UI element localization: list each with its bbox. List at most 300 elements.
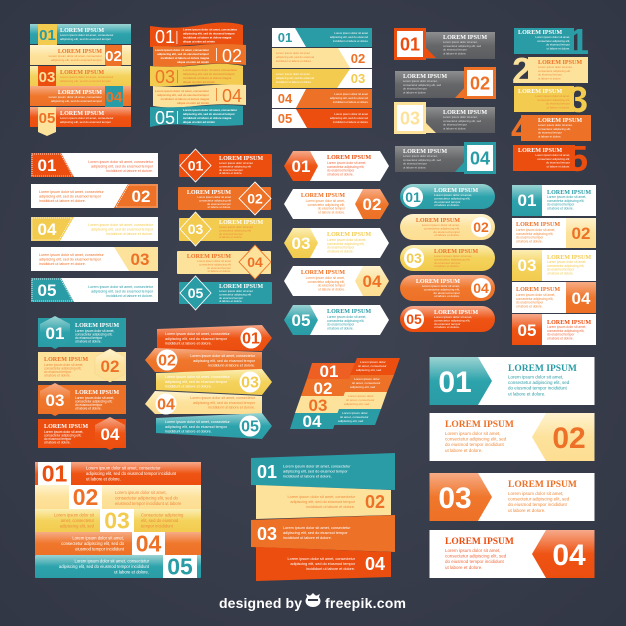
card 02: LOREM IPSUM bbox=[516, 222, 560, 228]
hex arrow 01: 01 bbox=[292, 157, 310, 176]
stair row 05: 05 bbox=[167, 554, 193, 580]
pill 05 bbox=[400, 306, 495, 332]
panel: dashed number tags bbox=[272, 28, 372, 128]
slant bar 05 bbox=[31, 278, 158, 302]
digit bar 4 bbox=[511, 108, 591, 149]
tag 01: 01 bbox=[278, 30, 292, 45]
badge row 04: Lorem ipsum dolor sit amet, bbox=[44, 430, 83, 434]
arrow banner 03 bbox=[156, 369, 272, 395]
pill 03: consectetur adipiscing elit, bbox=[434, 257, 470, 261]
grey bar 02: ut labore et dolore. bbox=[403, 90, 427, 94]
stair row 01 bbox=[35, 460, 201, 486]
hex arrow 04: consectetur adipiscing elit, bbox=[308, 280, 345, 284]
diamond bar 05: Lorem ipsum dolor sit amet bbox=[219, 289, 253, 293]
pill 01: ut labore et dolore. bbox=[434, 203, 460, 207]
large card 04: Lorem ipsum dolor sit amet, bbox=[445, 548, 501, 553]
tag 02: Lorem ipsum dolor sit amet bbox=[276, 51, 310, 55]
diamond bar 02: ut labore et dolore. bbox=[208, 205, 231, 209]
grey bar 04 bbox=[395, 144, 494, 172]
badge row 04 bbox=[38, 417, 126, 450]
tag 03: 03 bbox=[351, 71, 365, 86]
grey bar 01: Lorem ipsum dolor sit amet, bbox=[443, 40, 478, 44]
pill 02: Lorem ipsum dolor sit amet, bbox=[422, 223, 460, 227]
arrow banner 04 bbox=[145, 391, 262, 414]
arrow banner 03: adipiscing elit, sed do eiusmod tempor bbox=[165, 380, 228, 384]
hex arrow 02: consectetur adipiscing elit, bbox=[308, 203, 345, 207]
slant bar 01: Lorem ipsum dolor sit amet, consectetur bbox=[88, 160, 154, 164]
slant bar 04: 04 bbox=[38, 220, 57, 239]
skew bar 02 bbox=[256, 485, 391, 519]
stair row 02: eiusmod tempor incididunt ut labore bbox=[115, 501, 182, 506]
banner 02: Lorem ipsum dolor sit amet, consectetur bbox=[155, 48, 210, 52]
badge row 01: LOREM IPSUM bbox=[75, 323, 119, 329]
arrow banner 02: adipiscing elit, sed do eiusmod tempor bbox=[193, 359, 256, 363]
stair row 04: eiusmod tempor incididunt bbox=[75, 547, 125, 552]
slant bar 03 bbox=[31, 247, 158, 271]
arrow banner 02: Lorem ipsum dolor sit amet, consectetur bbox=[190, 354, 256, 358]
diamond bar 04: do eiusmod tempor bbox=[207, 266, 231, 270]
skew bar 03: 03 bbox=[257, 524, 277, 544]
stair row 02: consectetur adipiscing elit, sed do bbox=[115, 496, 179, 501]
fold row 01: Lorem ipsum dolor bbox=[360, 360, 386, 364]
arrow banner 05: incididunt ut labore et dolore. bbox=[165, 430, 212, 434]
card 05: do eiusmod tempor bbox=[547, 333, 575, 337]
grey bar 01: consectetur adipiscing elit, sed bbox=[443, 44, 482, 48]
tag 02 bbox=[272, 48, 372, 68]
skew bar 02: Lorem ipsum dolor sit amet, consectetur bbox=[287, 495, 356, 499]
tag 01 bbox=[272, 28, 372, 47]
card 03: Lorem ipsum dolor sit amet, bbox=[547, 260, 586, 264]
slant bar 05: 05 bbox=[38, 281, 56, 300]
slant bar 02: adipiscing elit, sed do eiusmod tempor bbox=[39, 194, 102, 198]
digit bar 1: do eiusmod tempor bbox=[546, 43, 570, 47]
diamond bar 02: Lorem ipsum dolor sit amet bbox=[197, 195, 231, 199]
row 01 teal: adipiscing elit, sed do eiusmod tempor bbox=[60, 37, 111, 41]
skew bar 04: incididunt ut labore et dolore. bbox=[306, 567, 355, 571]
diamond bar 01 bbox=[179, 149, 272, 182]
large card 02: Lorem ipsum dolor sit amet, bbox=[445, 431, 501, 436]
grey bar 03 bbox=[396, 104, 495, 133]
large card 02: ut labore et dolore. bbox=[445, 448, 483, 453]
digit bar 5: consectetur adipiscing elit, bbox=[537, 157, 570, 161]
badge row 01: do eiusmod tempor bbox=[75, 336, 103, 340]
banner 04 bbox=[153, 85, 246, 108]
card 03 bbox=[512, 250, 596, 281]
hex arrow 05: consectetur adipiscing elit, bbox=[327, 319, 364, 323]
card 01: ut labore et dolore. bbox=[547, 206, 574, 210]
arrow banner 04: adipiscing elit, sed do eiusmod tempor bbox=[193, 401, 256, 405]
tag 01: Lorem ipsum dolor sit amet bbox=[334, 31, 368, 35]
digit bar 1: consectetur adipiscing elit, bbox=[537, 39, 570, 43]
icon: freepik mascot bbox=[306, 593, 320, 607]
banner 01 bbox=[150, 22, 243, 47]
pill 02: do eiusmod tempor bbox=[434, 230, 460, 234]
diamond bar 02: LOREM IPSUM bbox=[187, 190, 231, 196]
stair row 05 bbox=[35, 554, 201, 580]
tag 05: incididunt ut labore et dolore bbox=[333, 120, 368, 124]
stair row 04 bbox=[35, 530, 201, 556]
fold row 03: Lorem ipsum dolor bbox=[348, 394, 374, 398]
fold row 04: Lorem ipsum dolor bbox=[342, 411, 368, 415]
digit bar 5: 5 bbox=[568, 138, 588, 179]
arrow banner 04: incididunt ut labore et dolore. bbox=[208, 406, 255, 410]
large card 04: 04 bbox=[552, 539, 586, 572]
badge row 01 bbox=[38, 316, 126, 349]
diamond bar 03: LOREM IPSUM bbox=[219, 220, 263, 226]
tag 04: incididunt ut labore et dolore bbox=[333, 100, 368, 104]
badge row 02: LOREM IPSUM bbox=[44, 357, 88, 363]
row 02 pale: Lorem ipsum dolor sit amet, consectetur bbox=[49, 54, 102, 58]
fold row 03: sit amet, consectetur bbox=[346, 398, 375, 402]
arrow banner 05: 05 bbox=[241, 418, 259, 436]
digit bar 1: LOREM IPSUM bbox=[518, 30, 562, 36]
row 05 red bbox=[30, 107, 131, 136]
pill 01: consectetur adipiscing elit, bbox=[434, 196, 470, 200]
row 01 teal: LOREM IPSUM bbox=[60, 28, 104, 34]
hex arrow 05: LOREM IPSUM bbox=[327, 309, 371, 315]
slant bar 03: adipiscing elit, sed do eiusmod tempor bbox=[39, 258, 102, 262]
diamond bar 04: LOREM IPSUM bbox=[187, 254, 231, 260]
digit bar 5 bbox=[513, 138, 588, 179]
pill 01: 01 bbox=[405, 189, 421, 205]
grey bar 04: LOREM IPSUM bbox=[403, 149, 447, 155]
digit bar 4: Lorem ipsum dolor sit amet, bbox=[538, 123, 573, 127]
diamond bar 01: 01 bbox=[188, 158, 203, 174]
grey bar 03: do eiusmod tempor bbox=[443, 123, 467, 127]
panel: alternating arrow banners bbox=[145, 325, 272, 439]
tag 03: adipiscing elit, sed do eiusmod bbox=[276, 76, 315, 80]
grey bar 01: 01 bbox=[400, 34, 420, 54]
pill 03: ut labore et dolore. bbox=[434, 264, 460, 268]
diamond bar 02 bbox=[178, 182, 271, 215]
badge row 01: consectetur adipiscing elit, bbox=[75, 332, 112, 336]
banner 01: adipiscing elit, sed do eiusmod tempor bbox=[183, 32, 236, 36]
banner 05: incididunt ut labore et dolore magna bbox=[183, 116, 232, 120]
grey bar 01: LOREM IPSUM bbox=[443, 35, 487, 41]
fold row 03 bbox=[295, 392, 387, 415]
tag 01: adipiscing elit, sed do eiusmod bbox=[330, 35, 368, 39]
grey bar 02: Lorem ipsum dolor sit amet, bbox=[403, 79, 438, 83]
panel: staircase list bbox=[35, 460, 201, 580]
banner 05: aliqua ut enim ad minim bbox=[183, 120, 215, 124]
arrow banner 05: adipiscing elit, sed do eiusmod tempor bbox=[165, 425, 228, 429]
hex arrow 04: do eiusmod tempor bbox=[318, 284, 346, 288]
tag 04: adipiscing elit, sed do eiusmod bbox=[330, 96, 368, 100]
banner 04: incididunt ut labore et dolore magna bbox=[161, 97, 209, 101]
pill 02: LOREM IPSUM bbox=[416, 218, 460, 224]
diamond bar 03 bbox=[179, 212, 272, 246]
digit bar 3: do eiusmod tempor bbox=[546, 102, 570, 106]
card 02: consectetur adipiscing elit, bbox=[516, 232, 553, 236]
badge row 04: do eiusmod tempor bbox=[44, 437, 72, 441]
hex arrow 05: Lorem ipsum dolor sit amet, bbox=[327, 315, 366, 319]
arrow banner 03: 03 bbox=[241, 374, 259, 392]
card 04: 04 bbox=[572, 289, 591, 308]
skew bar 04: adipiscing elit, sed do eiusmod tempor bbox=[290, 562, 356, 566]
badge row 02: consectetur adipiscing elit, bbox=[44, 366, 81, 370]
banner 04: 04 bbox=[222, 86, 242, 106]
badge row 01: Lorem ipsum dolor sit amet, bbox=[75, 329, 114, 333]
banner 05: Lorem ipsum dolor sit amet, consectetur bbox=[183, 108, 238, 112]
large card 01: ut labore et dolore. bbox=[508, 391, 546, 396]
grey bar 01 bbox=[396, 30, 495, 59]
large card 04 bbox=[430, 530, 594, 578]
grey bar 04: do eiusmod tempor bbox=[403, 162, 427, 166]
row 05 red: LOREM IPSUM bbox=[60, 111, 104, 117]
row 01 teal bbox=[30, 24, 131, 52]
hex arrow 03: LOREM IPSUM bbox=[327, 232, 371, 238]
hex arrow 02: 02 bbox=[363, 195, 381, 214]
panel: glossy pills bbox=[400, 184, 495, 332]
slant bar 02 bbox=[31, 184, 158, 208]
diamond bar 04: Lorem ipsum dolor sit amet bbox=[197, 259, 231, 263]
fold row 04: 04 bbox=[303, 412, 322, 431]
grey bar 04: ut labore et dolore. bbox=[403, 165, 427, 169]
diamond bar 05: ut labore et dolore. bbox=[219, 299, 243, 303]
banner 03: aliqua ut enim ad minim bbox=[183, 80, 215, 84]
large card 03 bbox=[430, 473, 594, 521]
diamond bar 04 bbox=[177, 245, 271, 279]
skew bar 01 bbox=[251, 453, 395, 490]
stair row 04: Lorem ipsum dolor sit amet, bbox=[72, 536, 124, 540]
pill 05: consectetur adipiscing elit, bbox=[434, 318, 470, 322]
hex arrow 01: ut labore et dolore. bbox=[327, 172, 354, 176]
banner 04: adipiscing elit, sed do eiusmod tempor bbox=[157, 93, 210, 97]
badge row 03: Lorem ipsum dolor sit amet, bbox=[75, 396, 114, 400]
arrow banner 02: incididunt ut labore et dolore. bbox=[208, 364, 255, 368]
diamond bar 03: Lorem ipsum dolor sit amet bbox=[219, 225, 253, 229]
pill 04: ut labore et dolore. bbox=[434, 294, 460, 298]
slant bar 04: Lorem ipsum dolor sit amet, consectetur bbox=[88, 223, 154, 227]
large card 03: Lorem ipsum dolor sit amet, bbox=[508, 491, 564, 496]
banner 01: 01 bbox=[155, 27, 175, 47]
skew bar 01: incididunt ut labore et dolore. bbox=[283, 474, 332, 478]
row 02 pale bbox=[30, 45, 131, 70]
row 05 red: 05 bbox=[39, 110, 55, 127]
card 03: do eiusmod tempor bbox=[547, 268, 575, 272]
badge row 01: ut labore et dolore. bbox=[75, 340, 102, 344]
banner 02: adipiscing elit, sed do eiusmod tempor bbox=[157, 52, 210, 56]
hex arrow 04: ut labore et dolore. bbox=[318, 287, 345, 291]
panel: folded parallelogram bbox=[290, 358, 400, 431]
large card 02: consectetur adipiscing elit, sed bbox=[445, 437, 507, 442]
pill 03: LOREM IPSUM bbox=[434, 249, 478, 255]
hex arrow 05 bbox=[284, 305, 389, 335]
pill 01: LOREM IPSUM bbox=[434, 188, 478, 194]
tag 04 bbox=[272, 89, 372, 108]
banner 01: Lorem ipsum dolor sit amet, consectetur bbox=[183, 28, 238, 32]
card 03: LOREM IPSUM bbox=[547, 255, 591, 261]
digit bar 3: ut labore et dolore. bbox=[547, 105, 570, 109]
pill 05: 05 bbox=[406, 311, 422, 327]
badge row 02: ut labore et dolore. bbox=[44, 374, 71, 378]
skew bar 01: Lorem ipsum dolor sit amet, consectetur bbox=[283, 464, 351, 468]
large card 01 bbox=[430, 357, 594, 405]
hex arrow 03: ut labore et dolore. bbox=[327, 249, 354, 253]
footer attribution bbox=[219, 593, 406, 611]
skew bar 04: Lorem ipsum dolor sit amet, consectetur bbox=[287, 557, 356, 561]
card 04: consectetur adipiscing elit, bbox=[516, 297, 553, 301]
grey bar 02 bbox=[395, 68, 494, 98]
diamond bar 04: consectetur adipiscing elit bbox=[199, 262, 231, 266]
fold row 03: 03 bbox=[309, 396, 327, 415]
large card 04: consectetur adipiscing elit, sed bbox=[445, 554, 507, 559]
banner 02: incididunt ut labore et dolore magna bbox=[161, 56, 209, 60]
digit bar 1: 1 bbox=[569, 21, 589, 62]
tag 02: 02 bbox=[351, 51, 365, 66]
slant bar 01: incididunt ut labore et dolore. bbox=[106, 169, 153, 173]
slant bar 04: incididunt ut labore et dolore. bbox=[106, 232, 153, 236]
grey bar 03: LOREM IPSUM bbox=[443, 110, 487, 116]
grey bar 03: consectetur adipiscing elit, sed bbox=[443, 119, 482, 123]
pill 01: Lorem ipsum dolor sit amet, bbox=[434, 193, 472, 197]
badge row 03: do eiusmod tempor bbox=[75, 403, 103, 407]
banner 05: 05 bbox=[155, 108, 175, 128]
digit bar 1: Lorem ipsum dolor sit amet, bbox=[535, 35, 570, 39]
diamond bar 05 bbox=[179, 276, 272, 310]
digit bar 2 bbox=[512, 50, 588, 91]
row 05 red: Lorem ipsum dolor sit amet, consectetur bbox=[60, 116, 113, 120]
digit bar 4: do eiusmod tempor bbox=[538, 131, 562, 135]
hex arrow 02: do eiusmod tempor bbox=[318, 207, 346, 211]
hex arrow 01: Lorem ipsum dolor sit amet, bbox=[327, 161, 366, 165]
card 05: 05 bbox=[518, 321, 536, 340]
grey bar 01: do eiusmod tempor bbox=[443, 48, 467, 52]
tag 05 bbox=[272, 109, 372, 128]
digit bar 2: do eiusmod tempor bbox=[538, 73, 562, 77]
panel: diamond bars bbox=[177, 149, 272, 310]
slant bar 04 bbox=[31, 217, 158, 241]
stair row 03 bbox=[35, 508, 201, 534]
row 03 yellow: adipiscing elit, sed do eiusmod tempor bbox=[60, 79, 111, 83]
slant bar 03: 03 bbox=[131, 250, 149, 269]
diamond bar 04: 04 bbox=[247, 254, 263, 270]
large card 01: Lorem ipsum dolor sit amet, bbox=[508, 374, 564, 380]
badge row 03 bbox=[38, 383, 126, 416]
card 04: ut labore et dolore. bbox=[516, 304, 543, 308]
hex arrow 02: Lorem ipsum dolor sit amet, bbox=[306, 199, 345, 203]
slant bar 02: 02 bbox=[132, 187, 150, 206]
stair row 05: adipiscing elit, sed do eiusmod tempor incididunt bbox=[59, 564, 150, 569]
digit bar 3: Lorem ipsum dolor sit amet, bbox=[535, 94, 570, 98]
fold row 04 bbox=[290, 409, 381, 431]
badge row 03: ut labore et dolore. bbox=[75, 406, 102, 410]
banner 03: adipiscing elit, sed do eiusmod tempor bbox=[183, 72, 236, 76]
row 03 yellow: Lorem ipsum dolor sit amet, consectetur bbox=[60, 75, 113, 79]
stair row 02: 02 bbox=[73, 484, 98, 510]
pill 03: Lorem ipsum dolor sit amet, bbox=[434, 254, 472, 258]
panel: grey bars with framed numbers bbox=[395, 30, 495, 172]
digit bar 5: LOREM IPSUM bbox=[518, 148, 562, 154]
fold row 01: sit amet, consectetur bbox=[358, 364, 387, 368]
grey bar 03: 03 bbox=[400, 108, 420, 128]
hex arrow 03 bbox=[284, 228, 389, 258]
pill 05: LOREM IPSUM bbox=[434, 310, 478, 316]
stair row 05: Lorem ipsum dolor sit amet, consectetur bbox=[75, 558, 150, 564]
banner 03: 03 bbox=[155, 67, 175, 87]
card 05: ut labore et dolore. bbox=[547, 336, 574, 340]
card 04: LOREM IPSUM bbox=[516, 287, 560, 293]
large card 01: consectetur adipiscing elit, sed bbox=[508, 380, 570, 385]
large card 01: LOREM IPSUM bbox=[508, 364, 577, 374]
arrow banner 05 bbox=[156, 413, 272, 439]
diamond bar 05: consectetur adipiscing elit bbox=[219, 292, 251, 296]
card 02: 02 bbox=[572, 224, 590, 243]
diamond bar 01: ut labore et dolore. bbox=[219, 171, 243, 175]
banner 05 bbox=[150, 105, 243, 128]
fold row 01: 01 bbox=[320, 362, 338, 381]
card 01 bbox=[512, 185, 596, 216]
skew bar 02: adipiscing elit, sed do eiusmod tempor bbox=[290, 500, 356, 504]
banner 03: Lorem ipsum dolor sit amet, consectetur bbox=[183, 68, 238, 72]
hex arrow 02: LOREM IPSUM bbox=[301, 193, 345, 199]
diamond bar 01: do eiusmod tempor bbox=[219, 168, 243, 172]
fold row 01 bbox=[307, 358, 400, 381]
large card 01: do eiusmod tempor incididunt bbox=[508, 386, 568, 391]
large card 02: 02 bbox=[552, 422, 586, 455]
card 05: consectetur adipiscing elit, bbox=[547, 329, 584, 333]
arrow banner 04: 04 bbox=[157, 396, 175, 414]
banner 01: incididunt ut labore et dolore magna bbox=[183, 36, 232, 40]
digit bar 1 bbox=[514, 21, 589, 62]
card 02: Lorem ipsum dolor sit amet, bbox=[516, 228, 555, 232]
hex arrow 01 bbox=[284, 151, 389, 181]
row 02 pale: adipiscing elit, sed do eiusmod tempor bbox=[51, 58, 102, 62]
digit bar 2: 2 bbox=[512, 50, 532, 91]
pill 03 bbox=[400, 245, 495, 271]
tag 05: Lorem ipsum dolor sit amet bbox=[334, 112, 368, 116]
stair row 01: ut labore et dolore. bbox=[86, 477, 121, 482]
row 02 pale: LOREM IPSUM bbox=[58, 49, 102, 55]
stair row 03: amet, consectetur bbox=[61, 518, 95, 523]
banner 03: incididunt ut labore et dolore magna bbox=[183, 76, 232, 80]
arrow banner 02: 02 bbox=[158, 352, 176, 370]
arrow banner 01: Lorem ipsum dolor sit amet, consectetur bbox=[165, 332, 231, 336]
slant bar 05: Lorem ipsum dolor sit amet, consectetur bbox=[88, 285, 154, 289]
badge row 02: 02 bbox=[101, 357, 119, 376]
pill 04: LOREM IPSUM bbox=[416, 279, 460, 285]
digit bar 2: ut labore et dolore. bbox=[538, 76, 562, 80]
fold row 02: adipiscing elit, sed bbox=[350, 385, 376, 389]
grey bar 01: ut labore et dolore. bbox=[443, 51, 467, 55]
card 01: Lorem ipsum dolor sit amet, bbox=[547, 195, 586, 199]
card 03: ut labore et dolore. bbox=[547, 271, 574, 275]
badge row 02: Lorem ipsum dolor sit amet, bbox=[44, 363, 83, 367]
diamond bar 01: consectetur adipiscing elit bbox=[219, 164, 251, 168]
digit bar 4: consectetur adipiscing elit, bbox=[538, 127, 571, 131]
banner 02: aliqua ut enim ad minim bbox=[177, 60, 210, 64]
arrow banner 02 bbox=[145, 348, 262, 372]
digit bar 5: ut labore et dolore. bbox=[547, 164, 570, 168]
banner 04: Lorem ipsum dolor sit amet, consectetur bbox=[155, 89, 210, 93]
diamond bar 01: Lorem ipsum dolor sit amet bbox=[219, 161, 253, 165]
arrow banner 04: Lorem ipsum dolor sit amet, consectetur bbox=[190, 396, 256, 400]
grey bar 02: consectetur adipiscing elit, sed bbox=[403, 83, 442, 87]
large card 02 bbox=[430, 413, 594, 461]
diamond bar 03: ut labore et dolore. bbox=[219, 235, 243, 239]
skew bar 01: 01 bbox=[257, 462, 277, 482]
skew bar 01: adipiscing elit, sed do eiusmod tempor bbox=[283, 470, 348, 474]
pill 04: 04 bbox=[473, 280, 489, 296]
row 04 orange: 04 bbox=[106, 89, 123, 106]
skew bar 02: 02 bbox=[365, 492, 385, 512]
diamond bar 04: ut labore et dolore. bbox=[208, 269, 231, 273]
hex arrow 04: Lorem ipsum dolor sit amet, bbox=[306, 276, 345, 280]
arrow banner 01 bbox=[157, 325, 272, 351]
skew bar 04 bbox=[256, 547, 391, 581]
slant bar 01: 01 bbox=[38, 156, 56, 175]
banner 02: 02 bbox=[222, 46, 242, 66]
